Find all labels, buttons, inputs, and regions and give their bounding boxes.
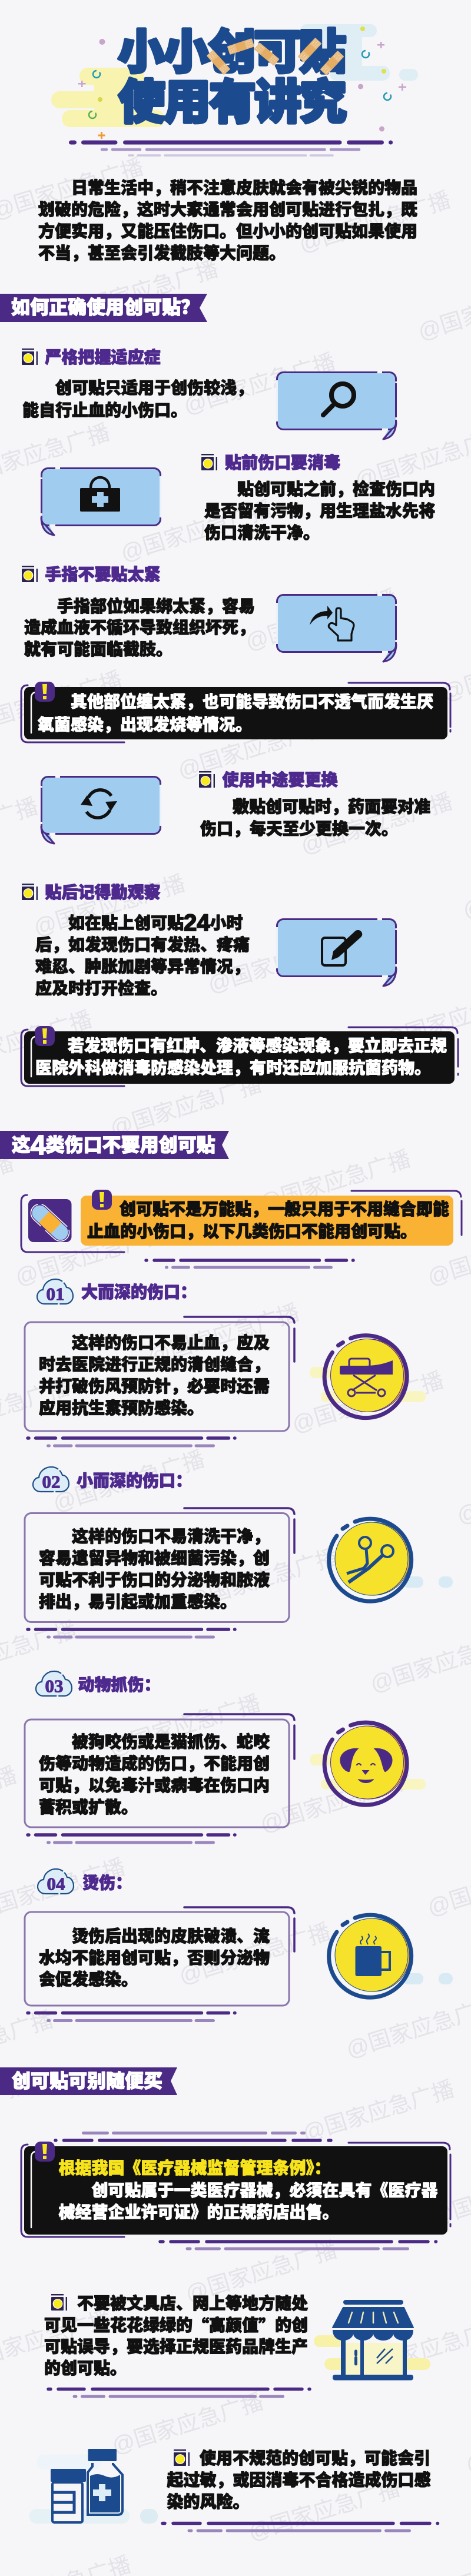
text block: 创可贴只适用于创伤较浅， (55, 378, 253, 397)
text block: 敷贴创可贴时，药面要对准 (233, 798, 430, 816)
icon: heading bullet (22, 348, 38, 365)
panel: 03 animal scratches (25, 1671, 426, 1843)
text block (44, 2293, 308, 2377)
title decoration: clouds and sparkles (51, 24, 418, 139)
icon: band-aid tile (27, 1199, 73, 1245)
heading: 手指不要贴太紧 (45, 565, 161, 584)
watermarks: @国家应急广播 (289, 1368, 447, 1438)
text block: 贴创可贴之前，检查伤口内 (237, 479, 435, 498)
text block: 造成血液不循环导致组织坏死， (24, 618, 255, 637)
watermarks: @国家应急广播 (118, 497, 276, 566)
text block: 是否留有污物，用生理盐水先将 (204, 502, 435, 520)
text block: 伤口清洗干净。 (204, 524, 320, 542)
watermarks: @国家应急广播 (256, 1147, 414, 1216)
text box: 排出，易引起或加重感染。 (39, 1592, 237, 1611)
icon: cloud number 01: 01 (46, 1283, 65, 1304)
icon: heading bullet (199, 771, 215, 788)
panel: disinfect first (41, 453, 435, 542)
text block: 的创可贴。 (44, 2359, 127, 2377)
icon: cloud number 02: 02 (42, 1472, 60, 1492)
icon: speech bubble with first aid kit (41, 469, 160, 535)
watermarks: @国家应急广播 (107, 1072, 265, 1141)
icon: cloud number 03: 03 (45, 1675, 64, 1697)
title: 小小创可贴 (118, 26, 346, 79)
text block: 可贴误导，要选择正规医药品牌生产 (44, 2338, 308, 2356)
icon: heading bullet (22, 884, 38, 900)
section banner: how to use: 如何正确使用创可贴？ (11, 297, 200, 318)
watermarks: @国家应急广播 (109, 2389, 267, 2459)
callout text (59, 2182, 438, 2222)
icon: exclamation badge (35, 682, 55, 702)
watermarks: @国家应急广播 (257, 1768, 415, 1837)
callout text: 止血的小伤口，以下几类伤口不能用创可贴。 (87, 1222, 417, 1241)
icon: speech bubble with magnifier (277, 372, 396, 439)
callout: infection warning (21, 1026, 458, 1086)
callout text: 若发现伤口有红肿、渗液等感染现象，要立即去正规 (68, 1036, 447, 1055)
title: 使用有讲究 (118, 77, 346, 128)
callout text (38, 692, 433, 733)
intro text: 划破的危险，这时大家通常会用创可贴进行包扎，既 (38, 200, 417, 219)
panel: 04 burns (25, 1869, 453, 2020)
icon: exclamation badge (92, 1190, 112, 1210)
text box: 容易遗留异物和被细菌污染，创 (39, 1548, 270, 1567)
intro text: 日常生活中，稍不注意皮肤就会有被尖锐的物品 (71, 178, 417, 197)
callout text: 氧菌感染，出现发烧等情况。 (38, 715, 252, 733)
text box (25, 1907, 294, 2006)
callout text: 创可贴不是万能贴，一般只用于不用缝合即能 (120, 1200, 449, 1219)
text box: 会促发感染。 (39, 1970, 138, 1989)
intro text (38, 178, 417, 263)
icon: speech bubble with hand (277, 595, 396, 662)
watermarks: @国家应急广播 (184, 1545, 341, 1614)
icon: scissors in circle (329, 1519, 453, 1601)
icon: band-aids on the title (207, 38, 344, 75)
watermarks: @国家应急广播 (296, 188, 454, 257)
panel: irregular band-aids risk (29, 2449, 438, 2531)
panel: strict indications (22, 347, 396, 439)
watermarks: @国家应急广播 (145, 1300, 303, 1370)
icon: cloud number 01 (37, 1279, 73, 1304)
section banner: four wound types: 这4类伤口不要用创可贴 (12, 1130, 215, 1160)
intro text: 不当，甚至会引发截肢等大问题。 (38, 244, 286, 263)
intro text: 方便实用，又能压住伤口。但小小的创可贴如果使用 (38, 221, 417, 240)
callout: anaerobic warning (21, 682, 450, 742)
text block: 应及时打开检查。 (35, 978, 167, 997)
icon: exclamation badge (35, 2142, 55, 2162)
text box (25, 1317, 294, 1431)
watermarks: @国家应急广播 (181, 350, 339, 419)
icon: cloud number 03 (36, 1671, 72, 1697)
text block: 起过敏，或因消毒不合格造成伤口感 (167, 2470, 431, 2489)
panel: observe after applying (22, 883, 396, 997)
text box: 可贴，以免毒汁或病毒在伤口内 (39, 1777, 270, 1794)
icon: hot mug in circle (329, 1915, 453, 1997)
heading: 烫伤： (82, 1874, 132, 1892)
heading: 动物抓伤： (78, 1675, 161, 1694)
panel: change during use (41, 770, 430, 844)
title (118, 26, 346, 128)
heading: 大而深的伤口： (81, 1283, 197, 1301)
text block: 染的风险。 (167, 2492, 250, 2511)
text block: 后，如发现伤口有发热、疼痛 (35, 935, 250, 954)
callout text: 械经营企业许可证》的正规药店出售。 (59, 2203, 339, 2222)
text block: 如在贴上创可贴24小时 (68, 910, 243, 936)
text box: 时去医院进行正规的清创缝合， (39, 1355, 270, 1374)
text box: 被狗咬伤或是猫抓伤、蛇咬 (72, 1732, 270, 1751)
text block: 可见一些花花绿绿的“高颜值”的创 (44, 2313, 308, 2337)
heading: 贴后记得勤观察 (45, 883, 161, 902)
icon: heading bullet (201, 454, 217, 470)
watermarks: @国家应急广播 (183, 2238, 340, 2307)
heading: 使用中途要更换 (223, 770, 338, 789)
text block: 使用不规范的创可贴，可能会引 (200, 2449, 430, 2468)
icon: medicine bottles (29, 2449, 158, 2524)
watermarks: @国家应急广播 (12, 1221, 170, 1290)
text block (22, 378, 253, 419)
text block: 就有可能面临截肢。 (24, 640, 173, 658)
icon: bullet (174, 2449, 190, 2466)
callout text: 创可贴属于一类医疗器械，必须在具有《医疗器 (92, 2182, 438, 2199)
text box: 烫伤后出现的皮肤破溃、流 (72, 1927, 270, 1945)
icon: speech bubble with refresh arrows (41, 777, 160, 844)
text box: 水均不能用创可贴，否则分泌物 (39, 1948, 270, 1967)
text box: 可贴不利于伤口的分泌物和脓液 (39, 1571, 270, 1589)
text box: 这样的伤口不易清洗干净， (72, 1527, 270, 1546)
watermarks: @国家应急广播 (31, 871, 188, 941)
heading: 贴前伤口要消毒 (225, 453, 340, 472)
watermarks: @国家应急广播 (243, 586, 400, 655)
section banner: do not buy casually: 创可贴可别随便买 (12, 2070, 162, 2092)
icon: stretcher in circle (310, 1336, 426, 1418)
section banner: how to use (0, 294, 207, 322)
text block: 不要被文具店、网上等地方随处 (77, 2293, 308, 2312)
panel: avoid stationery-store band-aids (44, 2293, 430, 2396)
panel: not too tight on fingers (22, 565, 396, 662)
icon: exclamation badge (35, 1026, 55, 1046)
text block (204, 479, 435, 542)
text block (24, 597, 255, 658)
panel: 02 small and deep wounds (25, 1467, 453, 1637)
watermarks: @国家应急广播 (106, 1691, 264, 1761)
icon: speech bubble with pencil (277, 919, 396, 986)
icon: heading bullet (22, 566, 38, 582)
heading: 小而深的伤口： (77, 1472, 192, 1490)
heading: 严格把握适应症 (45, 347, 161, 366)
panel: 01 large and deep wounds (25, 1279, 426, 1446)
regulation heading: 根据我国《医疗器械监督管理条例》： (59, 2158, 331, 2177)
callout text (87, 1200, 449, 1241)
watermarks: @国家应急广播 (175, 714, 333, 784)
text block: 难忍、肿胀加剧等异常情况， (35, 957, 250, 976)
watermarks: @国家应急广播 (300, 2077, 457, 2146)
text box (25, 1714, 294, 1827)
watermarks: @国家应急广播 (64, 257, 221, 326)
section banner: do not buy casually (0, 2067, 177, 2095)
text box: 这样的伤口不易止血，应及 (72, 1333, 270, 1352)
text box: 蓄积或扩散。 (39, 1798, 138, 1817)
text block: 能自行止血的小伤口。 (22, 401, 187, 419)
icon: storefront (314, 2300, 430, 2381)
text block: 手指部位如果绑太紧，容易 (57, 597, 255, 616)
text box: 应用抗生素预防感染。 (39, 1399, 204, 1418)
text box (25, 1508, 294, 1622)
callout text (35, 1036, 447, 1077)
text block (200, 798, 430, 838)
text block: 伤口，每天至少更换一次。 (200, 819, 398, 838)
text box: 并打破伤风预防针，必要时还需 (39, 1376, 270, 1395)
watermarks: @国家应急广播 (50, 1447, 208, 1516)
callout text: 其他部位缠太紧，也可能导致伤口不透气而发生厌 (71, 692, 433, 711)
icon: bullet (51, 2294, 67, 2311)
icon: dog face in circle (310, 1722, 426, 1805)
watermarks: @国家应急广播 (205, 928, 363, 998)
watermarks: @国家应急广播 (298, 789, 456, 859)
watermarks: @国家应急广播 (176, 1920, 334, 1989)
text box: 伤等动物造成的伤口，不能用创 (39, 1754, 270, 1773)
icon: cloud number 02 (33, 1467, 69, 1492)
callout text: 医院外科做消毒防感染处理，有时还应加服抗菌药物。 (35, 1058, 431, 1077)
text block (167, 2449, 431, 2511)
callout: band-aid is not universal (21, 1190, 462, 1252)
icon: cloud number 04: 04 (47, 1873, 65, 1894)
callout: medical device regulation (21, 2142, 450, 2237)
text block (35, 910, 250, 997)
watermarks: @国家应急广播 (246, 2476, 403, 2545)
icon: cloud number 04 (38, 1869, 74, 1894)
